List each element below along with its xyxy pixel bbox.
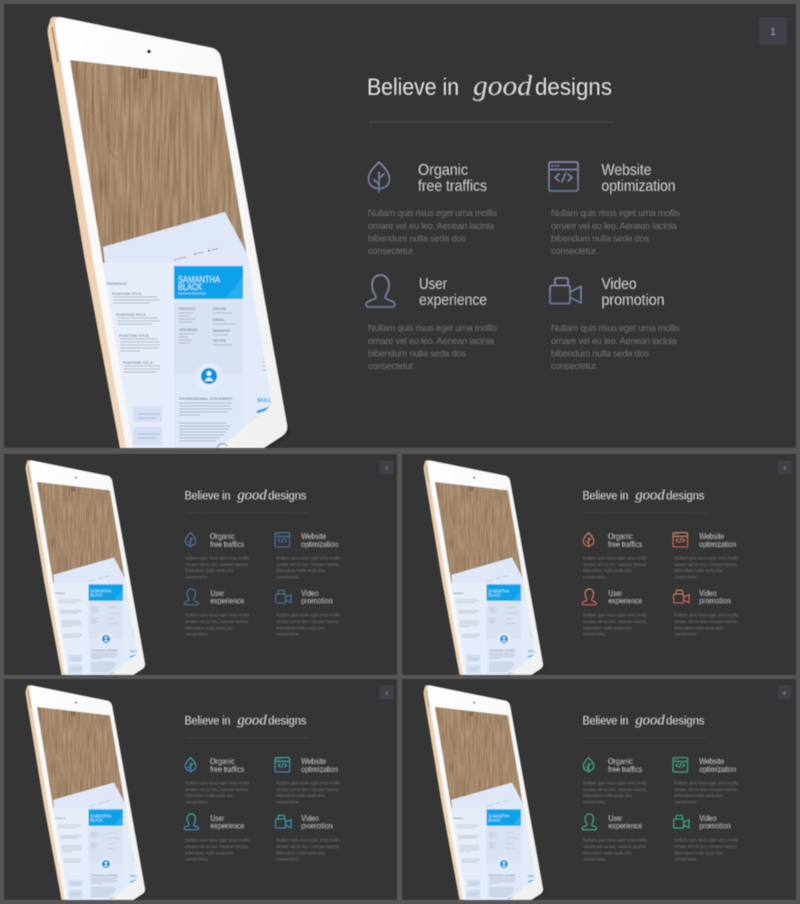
slide 5 feature: website: Nullam quis risus eget urna mollis bbox=[674, 780, 739, 785]
slide 2 icon: video camera bbox=[276, 590, 291, 603]
slide 4 feature: user: experience bbox=[210, 822, 245, 831]
slide 4 feature: organic: ornare vel eu leo. Aenean lacinia bbox=[185, 787, 248, 792]
slide 1 feature: organic: bibendum nulla seda dos bbox=[368, 234, 466, 244]
slide 5 feature: organic: Organic bbox=[608, 757, 633, 766]
slide 4 feature: user: User bbox=[210, 814, 225, 823]
slide 5 tablet mockup: BLACK bbox=[489, 817, 501, 822]
slide 3 number badge bbox=[778, 460, 792, 474]
slide 5 feature: organic bbox=[583, 757, 648, 804]
slide 4 title: Believe in bbox=[185, 713, 230, 727]
slide 5 feature: organic: Nullam quis risus eget urna mollis bbox=[583, 780, 648, 785]
slide 4 icon: video camera bbox=[276, 815, 291, 828]
slide 1 tablet mockup: SKILLS bbox=[257, 398, 275, 404]
slide 2 feature: user: experience bbox=[210, 597, 245, 606]
slide 1 feature: organic: free traffics bbox=[418, 178, 487, 195]
slide 1 feature: website: ornare vel eu leo. Aenean lacinia bbox=[551, 221, 678, 231]
slide 1 tablet mockup: SKYPE bbox=[213, 339, 226, 343]
slide 4 feature: website: Website bbox=[301, 757, 327, 766]
slide 4 tablet mockup: PROFESSIONAL STATEMENT bbox=[91, 874, 118, 877]
slide 2 feature: organic: bibendum nulla seda dos bbox=[185, 568, 235, 573]
slide 1 feature: video: bibendum nulla seda dos bbox=[551, 348, 649, 358]
slide 2 feature: organic: ornare vel eu leo. Aenean lacinia bbox=[185, 562, 248, 567]
slide 3 feature: organic bbox=[583, 532, 648, 579]
slide 1 tablet mockup: POSITION TITLE bbox=[112, 292, 142, 296]
slide 5 feature: organic: consectetur. bbox=[583, 799, 606, 804]
slide 4 feature: organic: Organic bbox=[210, 757, 235, 766]
slide 4 feature: video: promotion bbox=[301, 822, 333, 831]
slide 3 feature: user: consectetur. bbox=[583, 632, 606, 637]
slide 4 tablet mockup bbox=[26, 685, 146, 903]
slide 3 feature: user: bibendum nulla seda dos bbox=[583, 625, 633, 630]
slide 1 feature: organic: Organic bbox=[418, 162, 468, 179]
slide 1 feature: website: Website bbox=[602, 162, 652, 179]
slide 4 feature: user: Nullam quis risus eget urna mollis bbox=[185, 838, 250, 843]
slide 2 feature: website: bibendum nulla seda dos bbox=[276, 568, 326, 573]
slide 3 feature: video: Video bbox=[699, 589, 717, 598]
slide 3: orange variant bbox=[402, 454, 796, 678]
slide 2 icon: browser code bbox=[275, 533, 290, 547]
slide 5 feature: video: promotion bbox=[699, 822, 731, 831]
slide 1 feature: website: Nullam quis risus eget urna mollis bbox=[551, 208, 680, 218]
slide 5 title bbox=[583, 712, 704, 728]
slide 3 title bbox=[583, 487, 704, 503]
slide 4 feature: user: ornare vel eu leo. Aenean lacinia bbox=[185, 844, 248, 849]
slide 5 feature: user: Nullam quis risus eget urna mollis bbox=[583, 838, 648, 843]
slide 1 feature: video: Video bbox=[602, 276, 637, 293]
slide 5 feature: organic: bibendum nulla seda dos bbox=[583, 793, 633, 798]
slide 5 tablet mockup: EXPERIENCE bbox=[451, 818, 464, 820]
slide 5 feature: video: Video bbox=[699, 814, 717, 823]
slide 2 feature: user: consectetur. bbox=[185, 632, 208, 637]
slide 2 feature: website: consectetur. bbox=[276, 574, 300, 579]
slide 5 feature: website: ornare vel eu leo. Aenean lacinia bbox=[674, 787, 737, 792]
slide 4 feature: website: Nullam quis risus eget urna mollis bbox=[276, 780, 341, 785]
slide 1 feature: user: User bbox=[419, 276, 448, 293]
slide 1 icon: browser code bbox=[549, 162, 578, 191]
slide 1 tablet mockup: POSITION TITLE bbox=[119, 334, 149, 338]
slide 1 tablet mockup: PROFESSIONAL STATEMENT bbox=[179, 397, 233, 401]
slide 2 feature: organic: Nullam quis risus eget urna mollis bbox=[185, 555, 250, 560]
slide 5 feature: user: consectetur. bbox=[583, 857, 606, 862]
slide 2 tablet mockup: SKILLS bbox=[130, 650, 139, 653]
slide 2 number badge bbox=[380, 460, 394, 474]
slide 2 feature: user: ornare vel eu leo. Aenean lacinia bbox=[185, 619, 248, 624]
slide 4 feature: video: Nullam quis risus eget urna mollis bbox=[276, 838, 341, 843]
slide 3 feature: user: User bbox=[608, 589, 623, 598]
slide 4 feature: website: ornare vel eu leo. Aenean lacinia bbox=[276, 787, 339, 792]
slide 5 feature: website: consectetur. bbox=[674, 799, 698, 804]
slide 1 title bbox=[367, 70, 612, 102]
slide 5 feature: video bbox=[674, 814, 739, 862]
slide 3 feature: website: Nullam quis risus eget urna mollis bbox=[674, 555, 739, 560]
slide 3 feature: organic: ornare vel eu leo. Aenean lacinia bbox=[583, 562, 646, 567]
slide 4 number badge bbox=[380, 685, 394, 699]
slide 1 tablet mockup: ADDRESS bbox=[179, 328, 198, 332]
slide 4 icon: leaf bbox=[185, 758, 196, 773]
slide 3 feature: video: ornare vel eu leo. Aenean lacinia bbox=[674, 619, 737, 624]
slide 2 tablet mockup: PROFESSIONAL STATEMENT bbox=[91, 649, 118, 652]
slide 4 feature: organic: Nullam quis risus eget urna mollis bbox=[185, 780, 250, 785]
slide 1 feature: organic: Nullam quis risus eget urna mollis bbox=[368, 208, 497, 218]
slide 4 feature: website: optimization bbox=[301, 765, 338, 774]
slide 3 feature: organic: bibendum nulla seda dos bbox=[583, 568, 633, 573]
slide 5 feature: video: Nullam quis risus eget urna mollis bbox=[674, 838, 739, 843]
slide 2 icon: leaf bbox=[185, 533, 196, 548]
slide 4 tablet mockup: BLACK bbox=[91, 817, 103, 822]
slide 1 feature: organic bbox=[368, 162, 497, 256]
slide 4 tablet mockup: EXPERIENCE bbox=[53, 818, 66, 820]
slide 4 feature: website: bibendum nulla seda dos bbox=[276, 793, 326, 798]
slide 2 feature: organic bbox=[185, 532, 250, 579]
slide 5 feature: user: User bbox=[608, 814, 623, 823]
slide 2 number badge: 2 bbox=[385, 465, 388, 471]
slide 5 icon: user bbox=[582, 814, 597, 830]
slide 4 feature: video: consectetur. bbox=[276, 857, 300, 862]
slide 3 feature: organic: consectetur. bbox=[583, 574, 606, 579]
slide 2 feature: video: ornare vel eu leo. Aenean lacinia bbox=[276, 619, 339, 624]
slide 1 feature: website: consectetur. bbox=[551, 246, 598, 256]
slide 4 feature: organic bbox=[185, 757, 250, 804]
slide 3 icon: video camera bbox=[674, 590, 689, 603]
slide 4 feature: video: Video bbox=[301, 814, 319, 823]
slide 2 icon: user bbox=[184, 589, 199, 605]
slide 5 tablet mockup: SKILLS bbox=[528, 875, 537, 878]
slide 3 tablet mockup: EXPERIENCE bbox=[451, 593, 464, 595]
slide 1 feature: website bbox=[551, 162, 680, 256]
slide 1 feature: organic: consectetur. bbox=[368, 246, 415, 256]
slide 1: large main slide bbox=[4, 4, 796, 455]
slide 1 feature: user bbox=[368, 276, 497, 371]
slide 4 feature: user: consectetur. bbox=[185, 857, 208, 862]
slide 4 number badge: 4 bbox=[385, 690, 388, 696]
slide 4 feature: organic: bibendum nulla seda dos bbox=[185, 793, 235, 798]
slide 4 feature: user bbox=[185, 814, 250, 862]
slide 3 number badge: 3 bbox=[783, 465, 786, 471]
slide 4 feature: video bbox=[276, 814, 341, 862]
slide 2 tablet mockup: SAMANTHA bbox=[91, 589, 111, 594]
slide 2 feature: website bbox=[276, 532, 341, 579]
slide 3 feature: organic: Organic bbox=[608, 532, 633, 541]
slide 4 title: good bbox=[237, 712, 267, 728]
slide 5 icon: leaf bbox=[583, 758, 594, 773]
slide 3 feature: video: Nullam quis risus eget urna mollis bbox=[674, 613, 739, 618]
slide 3 feature: website: optimization bbox=[699, 540, 736, 549]
slide 5 feature: user: bibendum nulla seda dos bbox=[583, 850, 633, 855]
slide 1 tablet mockup: WEBSITE bbox=[213, 329, 231, 333]
slide 2 tablet mockup: EXPERIENCE bbox=[53, 593, 66, 595]
slide 1 tablet mockup: POSITION TITLE bbox=[123, 361, 153, 365]
slide 2 feature: video: Video bbox=[301, 589, 319, 598]
slide 2 title: designs bbox=[268, 488, 306, 502]
slide 3 tablet mockup: SKILLS bbox=[528, 650, 537, 653]
slide 3 feature: website: ornare vel eu leo. Aenean lacinia bbox=[674, 562, 737, 567]
slide 3 feature: user: experience bbox=[608, 597, 643, 606]
slide 1 tablet mockup: SAMANTHA bbox=[178, 274, 220, 284]
slide 1 feature: organic: ornare vel eu leo. Aenean lacinia bbox=[368, 221, 495, 231]
slide 5 tablet mockup: SAMANTHA bbox=[489, 814, 509, 819]
slide 3 icon: user bbox=[582, 589, 597, 605]
slide 5 icon: video camera bbox=[674, 815, 689, 828]
slide 1 icon: video camera bbox=[550, 278, 581, 304]
slide 3 feature: video: bibendum nulla seda dos bbox=[674, 625, 724, 630]
slide 1 tablet mockup bbox=[48, 17, 290, 455]
slide 1 tablet mockup: EMAIL bbox=[213, 318, 225, 322]
slide 5: green variant bbox=[402, 679, 796, 903]
slide 5 feature: organic: free traffics bbox=[608, 765, 642, 774]
slide 5 feature: website: optimization bbox=[699, 765, 736, 774]
slide 3 icon: leaf bbox=[583, 533, 594, 548]
slide 4 title bbox=[185, 712, 306, 728]
slide 1 tablet mockup: PROFILE bbox=[179, 307, 196, 311]
slide 5 feature: video: bibendum nulla seda dos bbox=[674, 850, 724, 855]
slide 5 feature: website: bibendum nulla seda dos bbox=[674, 793, 724, 798]
slide 2 feature: video: promotion bbox=[301, 597, 333, 606]
slide 3 feature: video: promotion bbox=[699, 597, 731, 606]
slide 3 tablet mockup bbox=[424, 460, 544, 678]
slide 1 number badge: 1 bbox=[770, 27, 776, 38]
slide 4 feature: user: bibendum nulla seda dos bbox=[185, 850, 235, 855]
slide 4 tablet mockup: SAMANTHA bbox=[91, 814, 111, 819]
slide 3 title: Believe in bbox=[583, 488, 628, 502]
slide 1 tablet mockup: GRAPHIC DESIGNER bbox=[178, 292, 206, 296]
slide 4 feature: website: consectetur. bbox=[276, 799, 300, 804]
slide 2 feature: organic: consectetur. bbox=[185, 574, 208, 579]
slide 1 title: Believe in bbox=[367, 74, 459, 101]
slide 3 title: good bbox=[635, 487, 665, 503]
slide 4 feature: organic: free traffics bbox=[210, 765, 244, 774]
slide 5 number badge: 5 bbox=[783, 690, 786, 696]
slide 3 feature: video bbox=[674, 589, 739, 637]
slide 2 feature: video bbox=[276, 589, 341, 637]
slide 2 feature: user: bibendum nulla seda dos bbox=[185, 625, 235, 630]
slide 2 title bbox=[185, 487, 306, 503]
slide 3 title: designs bbox=[666, 488, 704, 502]
slide 1 feature: user: experience bbox=[419, 292, 487, 309]
slide 2 feature: user: User bbox=[210, 589, 225, 598]
slide 3 feature: user bbox=[583, 589, 648, 637]
slide 4 icon: user bbox=[184, 814, 199, 830]
slide 3 feature: user: ornare vel eu leo. Aenean lacinia bbox=[583, 619, 646, 624]
slide 2 title: good bbox=[237, 487, 267, 503]
slide 5 title: Believe in bbox=[583, 713, 628, 727]
slide 1 feature: video: ornare vel eu leo. Aenean lacinia bbox=[551, 336, 678, 346]
slide 1 title: designs bbox=[535, 74, 612, 101]
slide 2 feature: website: Website bbox=[301, 532, 327, 541]
slide 1 tablet mockup: PHONE bbox=[213, 307, 227, 311]
slide 2 feature: video: consectetur. bbox=[276, 632, 300, 637]
slide 1 feature: user: consectetur. bbox=[368, 361, 415, 371]
slide 2 tablet mockup: BLACK bbox=[91, 592, 103, 597]
slide 1 feature: user: ornare vel eu leo. Aenean lacinia bbox=[368, 336, 495, 346]
slide 4 feature: video: bibendum nulla seda dos bbox=[276, 850, 326, 855]
slide 4 title: designs bbox=[268, 713, 306, 727]
slide 3 tablet mockup: PROFESSIONAL STATEMENT bbox=[489, 649, 516, 652]
slide 2 feature: website: Nullam quis risus eget urna mollis bbox=[276, 555, 341, 560]
slide 4 tablet mockup: SKILLS bbox=[130, 875, 139, 878]
slide 1 feature: video bbox=[551, 276, 680, 371]
slide 1 tablet mockup: POSITION TITLE bbox=[116, 313, 146, 317]
slide 3 feature: website: bibendum nulla seda dos bbox=[674, 568, 724, 573]
slide 5 icon: browser code bbox=[673, 758, 688, 772]
slide 5 number badge bbox=[778, 685, 792, 699]
slide 3 tablet mockup: BLACK bbox=[489, 592, 501, 597]
slide 5 feature: website bbox=[674, 757, 739, 804]
slide 1 feature: video: promotion bbox=[602, 292, 664, 309]
slide 2 feature: video: bibendum nulla seda dos bbox=[276, 625, 326, 630]
slide 2 tablet mockup bbox=[26, 460, 146, 678]
slide 1 feature: user: Nullam quis risus eget urna mollis bbox=[368, 323, 497, 333]
slide 4 feature: organic: consectetur. bbox=[185, 799, 208, 804]
slide 1 number badge bbox=[759, 17, 787, 45]
slide 4: teal-blue variant bbox=[4, 679, 397, 903]
slide 1 icon: leaf bbox=[368, 162, 390, 192]
slide 1 feature: video: consectetur. bbox=[551, 361, 598, 371]
slide 1 feature: website: bibendum nulla seda dos bbox=[551, 234, 649, 244]
slide 5 feature: website: Website bbox=[699, 757, 725, 766]
slide 5 feature: video: ornare vel eu leo. Aenean lacinia bbox=[674, 844, 737, 849]
slide 1 icon: user bbox=[366, 275, 395, 307]
slide 3 feature: website: consectetur. bbox=[674, 574, 698, 579]
slide 2 feature: website: ornare vel eu leo. Aenean lacinia bbox=[276, 562, 339, 567]
slide 5 feature: organic: ornare vel eu leo. Aenean lacinia bbox=[583, 787, 646, 792]
slide 5 tablet mockup: PROFESSIONAL STATEMENT bbox=[489, 874, 516, 877]
slide 3 feature: website: Website bbox=[699, 532, 725, 541]
slide 3 feature: organic: Nullam quis risus eget urna mollis bbox=[583, 555, 648, 560]
slide 2 feature: video: Nullam quis risus eget urna mollis bbox=[276, 613, 341, 618]
slide 2: blue variant bbox=[4, 454, 397, 678]
slide 2 feature: website: optimization bbox=[301, 540, 338, 549]
slide 1 tablet mockup: BLACK bbox=[178, 282, 202, 292]
slide 3 feature: organic: free traffics bbox=[608, 540, 642, 549]
slide 5 feature: user: experience bbox=[608, 822, 643, 831]
slide 5 tablet mockup bbox=[424, 685, 544, 903]
slide 5 feature: video: consectetur. bbox=[674, 857, 698, 862]
slide 3 feature: user: Nullam quis risus eget urna mollis bbox=[583, 613, 648, 618]
slide 3 tablet mockup: SAMANTHA bbox=[489, 589, 509, 594]
slide 4 icon: browser code bbox=[275, 758, 290, 772]
slide 1 feature: user: bibendum nulla seda dos bbox=[368, 348, 466, 358]
slide 1 title: good bbox=[473, 70, 533, 102]
slide 2 feature: organic: free traffics bbox=[210, 540, 244, 549]
slide 4 feature: website bbox=[276, 757, 341, 804]
slide 2 title: Believe in bbox=[185, 488, 230, 502]
slide 1 tablet mockup: EXPERIENCE bbox=[103, 282, 127, 286]
slide 1 feature: video: Nullam quis risus eget urna mollis bbox=[551, 323, 680, 333]
slide 5 title: good bbox=[635, 712, 665, 728]
slide 2 feature: organic: Organic bbox=[210, 532, 235, 541]
slide 3 feature: video: consectetur. bbox=[674, 632, 698, 637]
slide 5 feature: user: ornare vel eu leo. Aenean lacinia bbox=[583, 844, 646, 849]
slide 5 title: designs bbox=[666, 713, 704, 727]
slide 1 feature: website: optimization bbox=[602, 178, 676, 195]
slide 3 icon: browser code bbox=[673, 533, 688, 547]
slide 4 feature: video: ornare vel eu leo. Aenean lacinia bbox=[276, 844, 339, 849]
slide 2 feature: user: Nullam quis risus eget urna mollis bbox=[185, 613, 250, 618]
slide 3 feature: website bbox=[674, 532, 739, 579]
slide 2 feature: user bbox=[185, 589, 250, 637]
slide 5 feature: user bbox=[583, 814, 648, 862]
